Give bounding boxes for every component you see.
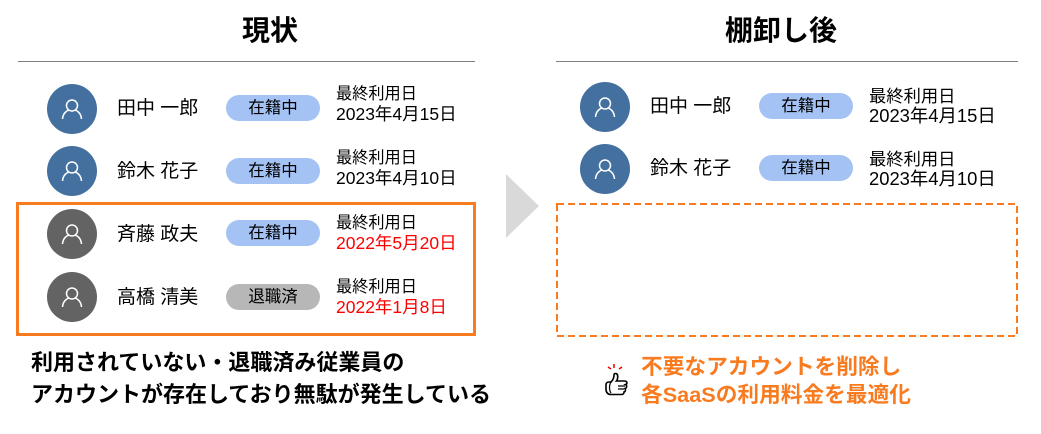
last used date: 最終利用日 xyxy=(336,214,417,232)
status pill xyxy=(759,93,853,119)
status pill xyxy=(226,95,320,121)
last used date: 最終利用日 xyxy=(336,85,417,103)
status pill: 退職済 xyxy=(248,288,298,306)
icon: user avatar xyxy=(47,84,97,134)
last used date: 最終利用日 xyxy=(869,149,955,169)
icon: user avatar xyxy=(580,144,630,194)
text: outcome statement xyxy=(641,354,911,407)
last used date xyxy=(336,278,447,317)
last used date: 2023年4月15日 xyxy=(336,104,457,124)
status pill xyxy=(759,155,853,181)
name: 斉藤 政夫 xyxy=(117,224,198,245)
row: Suzuki after xyxy=(580,144,996,194)
last used date: 2022年1月8日 xyxy=(336,297,447,317)
status pill: 在籍中 xyxy=(781,159,831,177)
heading: current state: 現状 xyxy=(242,15,298,46)
row: Tanaka xyxy=(47,84,457,134)
icon: user avatar xyxy=(580,82,630,132)
row: Tanaka after xyxy=(580,82,996,132)
last used date xyxy=(336,214,457,253)
arrow xyxy=(506,174,539,238)
icon: user avatar xyxy=(47,146,97,196)
row: Saito xyxy=(47,209,457,259)
status pill xyxy=(226,158,320,184)
icon: user avatar xyxy=(47,209,97,259)
last used date: 最終利用日 xyxy=(869,86,955,106)
name: 鈴木 花子 xyxy=(117,161,198,182)
last used date: 最終利用日 xyxy=(336,149,417,167)
text: problem statement: 利用されていない・退職済み従業員の xyxy=(31,350,404,375)
last used date xyxy=(869,149,996,189)
last used date: 2022年5月20日 xyxy=(336,233,457,253)
name: 田中 一郎 xyxy=(117,98,198,119)
last used date xyxy=(869,86,996,126)
text: outcome statement: 各SaaSの利用料金を最適化 xyxy=(641,382,911,407)
status pill: 在籍中 xyxy=(248,224,298,242)
dashed empty box: removed accounts xyxy=(556,203,1018,337)
text: problem statement xyxy=(31,350,491,407)
heading: after cleanup: 棚卸し後 xyxy=(725,15,837,46)
last used date: 最終利用日 xyxy=(336,278,417,296)
last used date: 2023年4月10日 xyxy=(869,168,996,189)
text: problem statement: アカウントが存在しており無駄が発生している xyxy=(31,382,491,407)
row: Suzuki xyxy=(47,146,457,196)
name: 鈴木 花子 xyxy=(650,158,731,179)
status pill xyxy=(226,220,320,246)
name: 高橋 清美 xyxy=(117,287,198,308)
name: 田中 一郎 xyxy=(650,96,731,117)
icon: user avatar xyxy=(47,272,97,322)
text: outcome statement: 不要なアカウントを削除し xyxy=(641,354,901,379)
last used date: 2023年4月10日 xyxy=(336,168,457,188)
last used date xyxy=(336,85,457,124)
status pill: 在籍中 xyxy=(781,97,831,115)
highlight box: unused accounts xyxy=(16,202,476,336)
status pill: 在籍中 xyxy=(248,99,298,117)
row: Takahashi xyxy=(47,272,447,322)
status pill: 在籍中 xyxy=(248,162,298,180)
icon: thumbs up xyxy=(605,364,628,396)
status pill xyxy=(226,284,320,310)
last used date: 2023年4月15日 xyxy=(869,105,996,126)
last used date xyxy=(336,149,457,188)
